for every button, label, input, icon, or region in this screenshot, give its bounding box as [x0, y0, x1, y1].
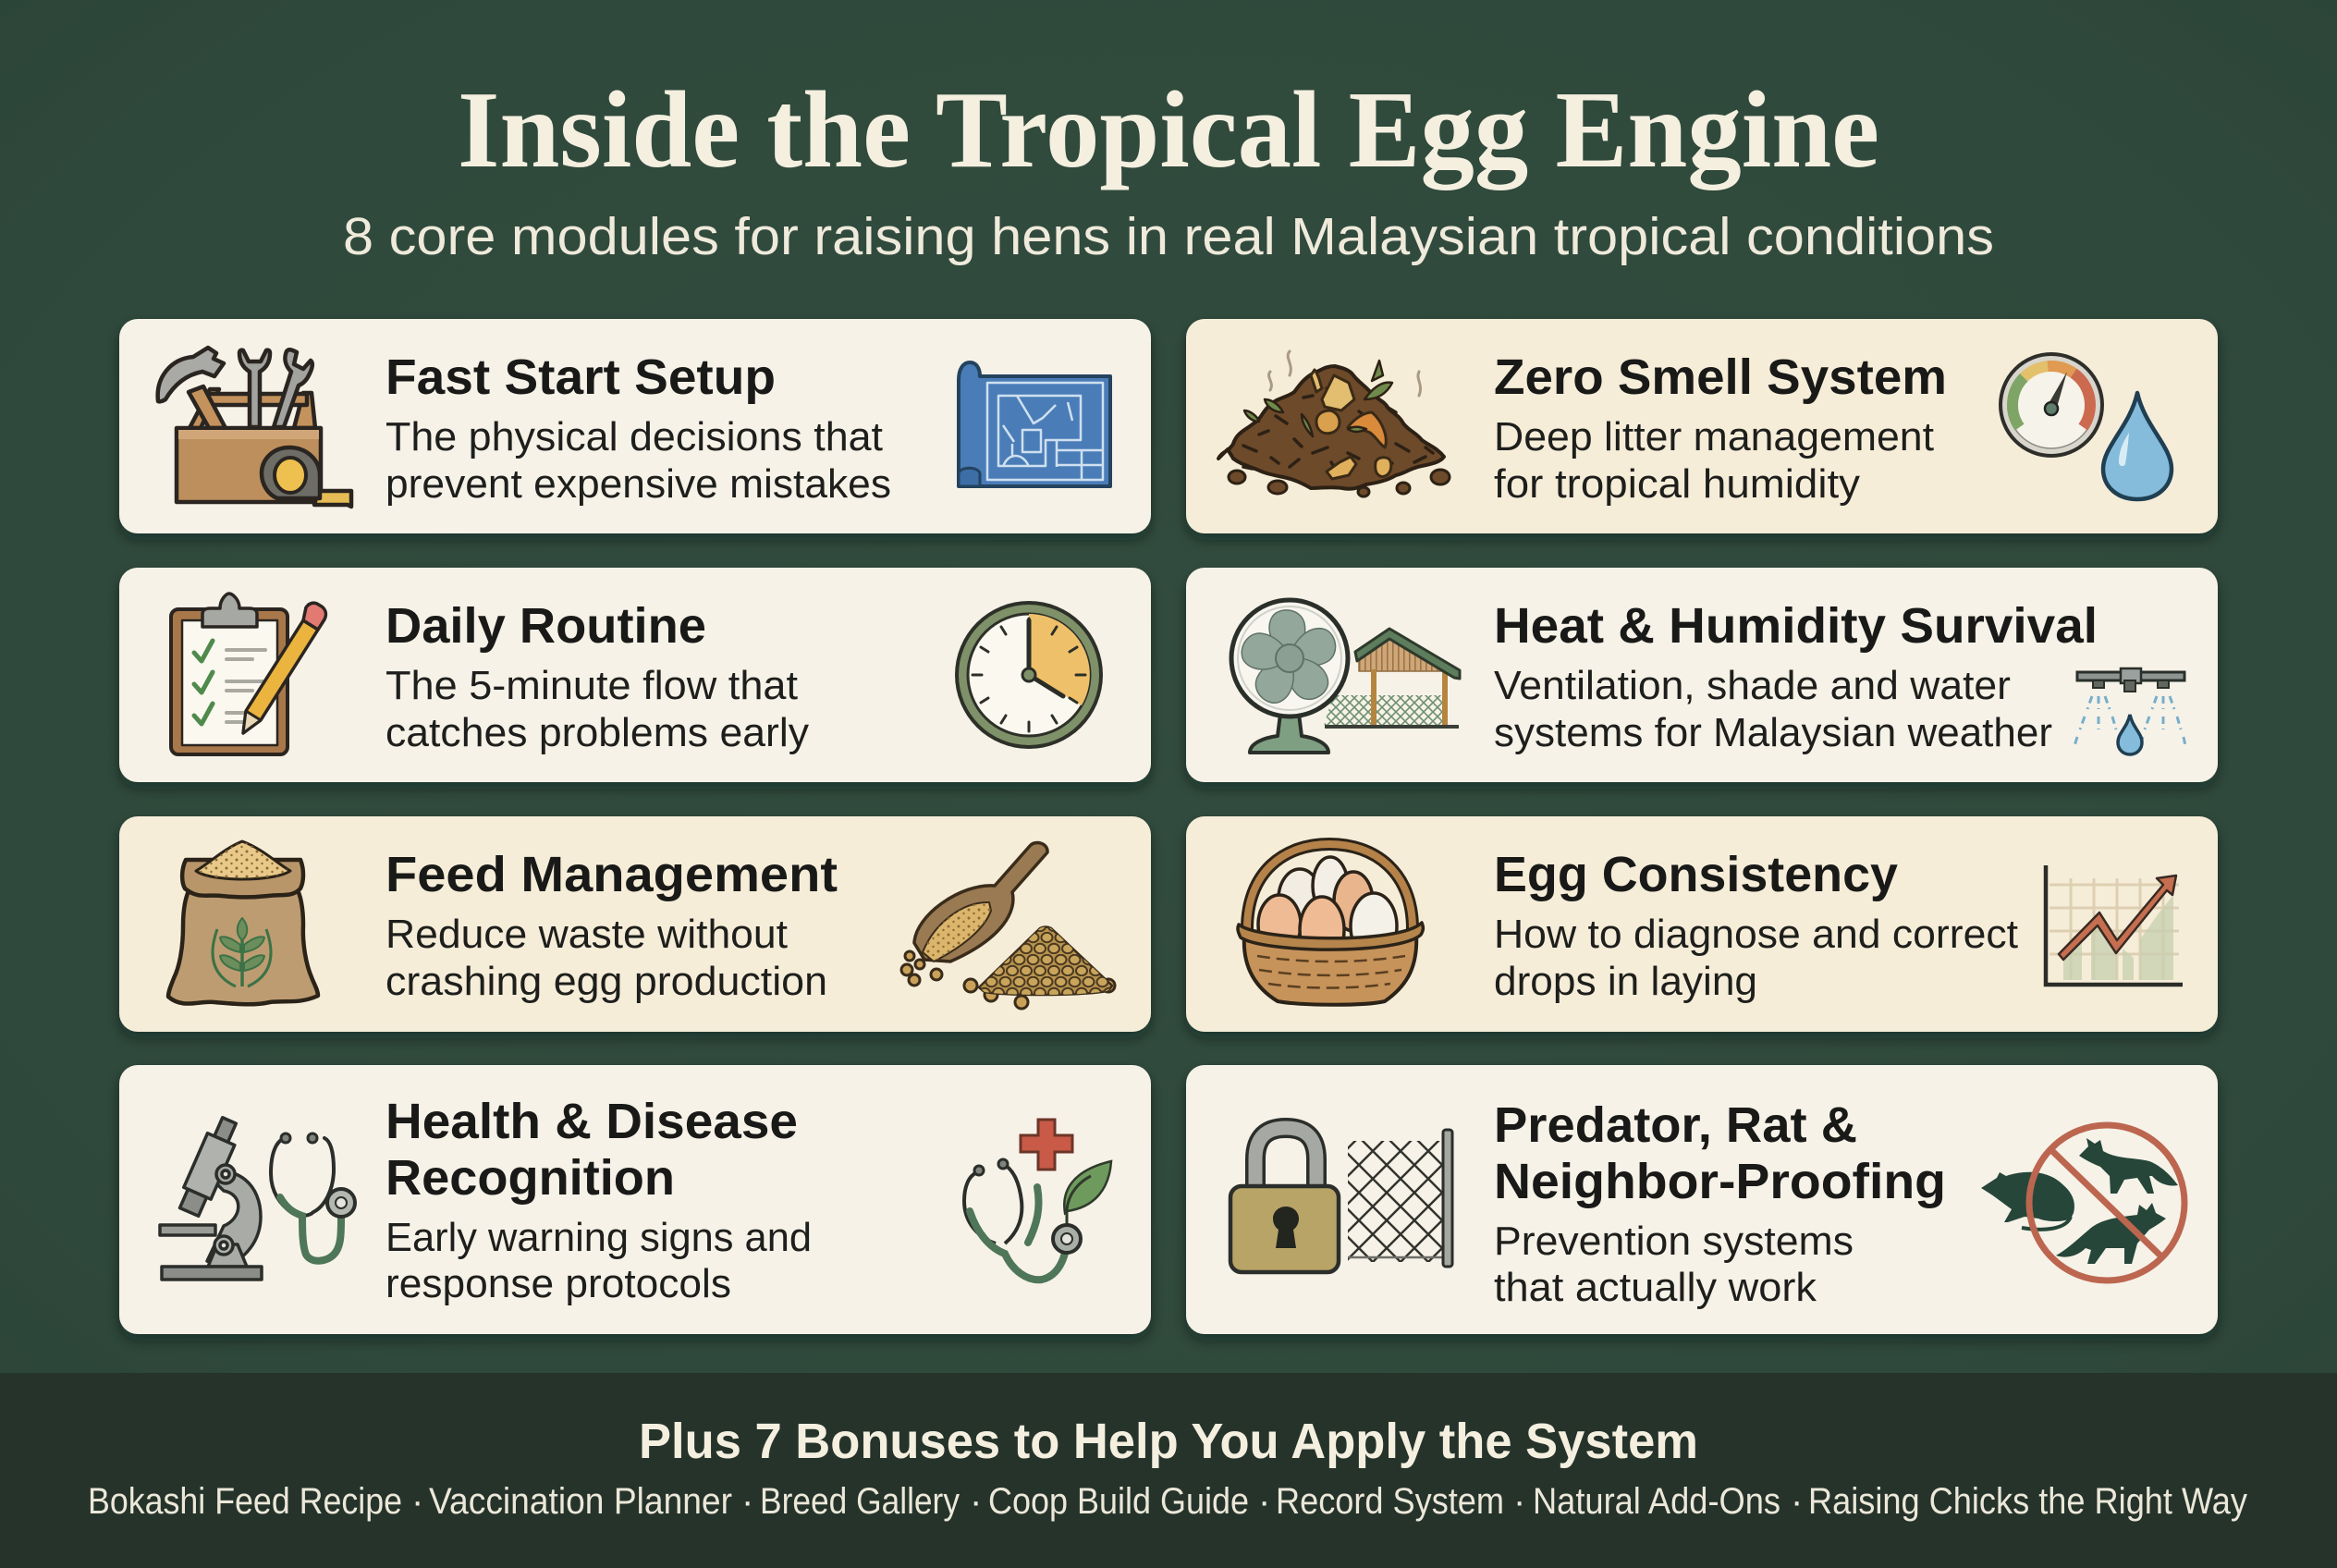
footer bar — [0, 1373, 2337, 1568]
icon: microscope — [160, 1115, 262, 1280]
panel: Feed Management: crashing egg production — [385, 959, 827, 1004]
panel: Egg Consistency: drops in laying — [1494, 959, 1757, 1004]
heading: Predator, Rat & Neighbor-Proofing: Predator, Rat & — [1494, 1097, 1857, 1153]
icon: feed sack — [168, 841, 318, 1004]
panel: Heat & Humidity Survival: systems for Malaysian weather — [1494, 710, 2052, 755]
icon: clock — [955, 601, 1103, 749]
icon: egg basket — [1238, 844, 1423, 1005]
icon: stethoscope with cross and leaf — [964, 1120, 1111, 1280]
panel: Heat & Humidity Survival — [1186, 568, 2218, 782]
heading: Fast Start Setup: Fast Start Setup — [385, 349, 776, 405]
footer bonus list: Breed Gallery — [760, 1481, 960, 1522]
panel: Predator, Rat & Neighbor-Proofing: Neighbor-Proofing — [1494, 1154, 1946, 1209]
panel: Fast Start Setup — [119, 319, 1151, 533]
icon: misting sprinklers — [2074, 668, 2185, 754]
footer bonus list: · — [1258, 1481, 1270, 1522]
footer bonus list: Coop Build Guide — [988, 1481, 1249, 1522]
icon: water drop — [2103, 393, 2172, 499]
icon: chain-link fence — [1348, 1130, 1452, 1267]
panel: Predator, Rat & Neighbor-Proofing: that actually work — [1494, 1265, 1817, 1310]
icon: rising chart — [2046, 865, 2183, 985]
panel: Health & Disease Recognition — [119, 1065, 1151, 1334]
title: Inside the Tropical Egg Engine — [458, 68, 1879, 190]
panel: Daily Routine — [119, 568, 1151, 782]
footer bonus list: · — [1791, 1481, 1803, 1522]
icon: compost pile — [1218, 351, 1450, 496]
panel: Zero Smell System — [1186, 319, 2218, 533]
panel: Egg Consistency — [1186, 816, 2218, 1032]
icon: clipboard and pencil — [171, 594, 325, 754]
panel: Fast Start Setup: prevent expensive mistakes — [385, 461, 891, 507]
text: Feed Management description: Reduce waste without — [385, 912, 788, 957]
panel: Predator, Rat & Neighbor-Proofing — [1186, 1065, 2218, 1334]
icon: stethoscope — [271, 1133, 355, 1261]
icon: no-pests sign with rat and foxes — [1981, 1125, 2184, 1280]
footer bonus list: Record System — [1276, 1481, 1504, 1522]
fox silhouette lower — [2056, 1203, 2166, 1264]
rat silhouette — [1981, 1172, 2074, 1230]
heading: Daily Routine: Daily Routine — [385, 598, 706, 654]
fox silhouette upper — [2079, 1138, 2178, 1194]
panel: Daily Routine: catches problems early — [385, 710, 809, 755]
icon: padlock — [1230, 1128, 1339, 1272]
footer bonus list — [88, 1481, 2247, 1522]
panel: Feed Management — [119, 816, 1151, 1032]
icon: humidity gauge — [2001, 354, 2102, 456]
footer bonus list: · — [1513, 1481, 1525, 1522]
text: Zero Smell System description: Deep litter management — [1494, 414, 1934, 459]
text: Fast Start Setup description: The physical decisions that — [385, 414, 883, 459]
footer bonus list: Vaccination Planner — [429, 1481, 732, 1522]
panel: Health & Disease Recognition: Recognition — [385, 1150, 675, 1206]
footer bonus list: · — [970, 1481, 982, 1522]
footer bonus list: Bokashi Feed Recipe — [88, 1481, 402, 1522]
text: Health & Disease Recognition description: Early warning signs and — [385, 1215, 812, 1260]
panel: Zero Smell System: for tropical humidity — [1494, 461, 1860, 507]
icon: blueprint — [959, 362, 1110, 486]
icon: electric fan — [1231, 600, 1348, 753]
text: Heat & Humidity Survival description: Ventilation, shade and water — [1494, 663, 2011, 708]
subtitle: 8 core modules for raising hens in real Malaysian tropical conditions — [343, 207, 1994, 266]
text: Egg Consistency description: How to diagnose and correct — [1494, 912, 2018, 957]
footer heading: Plus 7 Bonuses to Help You Apply the System — [639, 1414, 1698, 1469]
text: Daily Routine description: The 5-minute flow that — [385, 663, 798, 708]
panel: Health & Disease Recognition: response protocols — [385, 1261, 731, 1306]
icon: toolbox with tools — [158, 348, 351, 507]
footer bonus list: · — [411, 1481, 423, 1522]
heading: Zero Smell System: Zero Smell System — [1494, 349, 1947, 405]
icon: scoop and grain — [901, 842, 1115, 1009]
heading: Feed Management: Feed Management — [385, 847, 838, 902]
icon: shaded coop — [1324, 629, 1460, 727]
text: Predator, Rat & Neighbor-Proofing description: Prevention systems — [1494, 1219, 1854, 1264]
heading: Heat & Humidity Survival: Heat & Humidity Survival — [1494, 598, 2098, 654]
footer bonus list: Raising Chicks the Right Way — [1808, 1481, 2247, 1522]
footer bonus list: Natural Add-Ons — [1533, 1481, 1780, 1522]
heading: Egg Consistency: Egg Consistency — [1494, 847, 1898, 902]
footer bonus list: · — [741, 1481, 753, 1522]
heading: Health & Disease Recognition: Health & Disease — [385, 1094, 798, 1149]
